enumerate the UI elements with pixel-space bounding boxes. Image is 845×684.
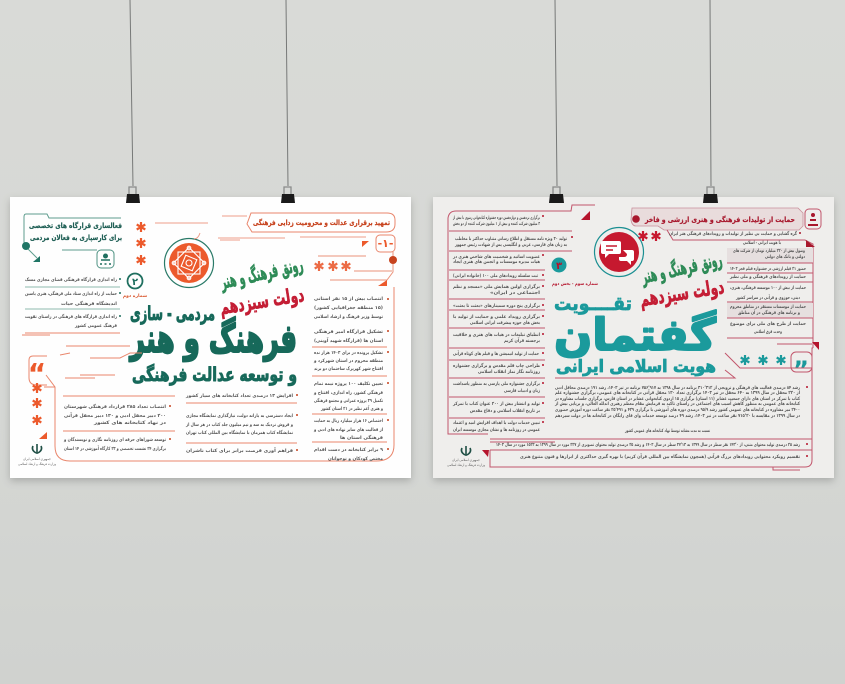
- main title: [554, 293, 716, 377]
- panel: right text column: (۱۵ منطقه جغرافیایی کشور): [314, 305, 383, 311]
- panel: main paragraph: رشد ۲۵ درصدی تولید محتوای متنی، از ۱۴۳٬۰ نفر سطر در سال ۱۳۹۹ به ۳۷٬۱۳ سطر در سال ۱۴۰۳ و رشد ۲۵ درصدی تولید محتوای تصویری از ۲۲۷ مورد در سال ۱۳۹۹ به ۱۵۲۳ مورد در سال ۱۴۰۳: [496, 442, 800, 448]
- panel: left text column: برگزاری اولین همایش ملی «مسجد و نظم: [453, 283, 540, 290]
- panel: main paragraph: [490, 344, 813, 470]
- panel: support heading: حمایت از تولیدات فرهنگی و هنری ارزشی و فاخر: [644, 215, 795, 224]
- poster: culture and art, people-centred: [10, 197, 411, 478]
- panel: main paragraph: ۲۴۰۰ میز مشاوره در کتابخانه های عمومی کشور رشد ۹۵/۹ درصدی دوره های آموزشی با برگزاری ۴۲۹ و ۲۵٬۴۹۱ نفر ساعت دوره آموزش حضوری: [555, 406, 800, 413]
- panel: left text column: ۳ میلیون شرکت کننده و بیش از ۱ میلیون شرکت کننده از دو بخش: [453, 221, 540, 227]
- panel: right text column: ۹ برابر کتابخانه در دست اقدام: [314, 447, 383, 453]
- panel: right text column: [667, 230, 815, 348]
- emblem: ministry logo: وزارت فرهنگ و ارشاد اسلامی: [18, 462, 56, 466]
- panel: right text column: تشکیل قرارگاه امیر فرهنگی: [314, 328, 383, 335]
- asterisks row top: [639, 231, 660, 241]
- panel: left text column: زبان و ادبیات فارسی: [504, 388, 540, 394]
- panel: main paragraph: در سال ۱۳۹۹ در مقایسه با ۷۱۵٬۲۰ نفر ساعت در تیر ۱۴۰۳، رشد ۴۹ درصد توسعه خدمات وای فای رایگان در کتابخانه ها در دولت سیزدهم: [555, 412, 800, 419]
- panel: right text column: تشکیل پرونده در برای ۱۴۰۳ هزار نده: [314, 350, 383, 356]
- main title: فرهنگ و هنر: [129, 316, 297, 362]
- main title: گفتمان: [554, 309, 716, 361]
- panel: main paragraph: کتاب با تمرکز در استان های دارای جمعیت عشایر (۱۱ استان) برگزاری ۱۵ اردوی کتابخوانی عشایر در استان فارس، برگزاری جلسات مشاوره در: [554, 395, 800, 402]
- panel: left text column: انطباق تبلیغات در هیات های هنری و خلاقیت: [453, 332, 540, 338]
- panel: left lower text column: انتصاب تعداد ۲۸۵ قرارداد فرهنگی شهرستان: [64, 403, 166, 410]
- asterisks row teal: [741, 355, 785, 365]
- panel: right text column: حمایت از رویدادهای فرهنگی و ملی نظیر: [729, 273, 806, 280]
- panel: left text column: هیات مدیره موسسات و انجمن های هنری ایجاد: [453, 259, 540, 265]
- panel: left text column: برگزاری رویداد علمی و حمایت از تولید با: [453, 313, 540, 320]
- panel: right text column: و برنامه های فرهنگی در آن مناطق: [738, 309, 800, 316]
- triangle marker lower: [482, 450, 489, 457]
- panel: workshop bullet list: راه اندازی قرارگاه فرهنگی فضای مجازی مسک: [25, 276, 117, 283]
- panel: workshop bullet list: حمایت از راه اندازی ستاد ملی فرهنگی، هنری یاسین: [25, 290, 117, 297]
- issue number badge: شماره دوم: [123, 294, 148, 299]
- emblem: ministry logo: جمهوری اسلامی ایران: [452, 458, 480, 462]
- panel: right text column: وحدت فرق اسلامی: [754, 329, 782, 335]
- panel: support heading: [631, 208, 803, 230]
- panel: left lower text column: ۲۰۰ دبیر محفل ادبی و ۱۳۰ دبیر محفل قرآنی: [64, 412, 166, 419]
- asterisks row: [315, 261, 350, 271]
- emblem: ministry logo: وزارت فرهنگ و ارشاد اسلامی: [447, 463, 485, 467]
- issue number badge: [552, 258, 598, 287]
- panel: main paragraph: از ۲۲۰ محفل در سال ۱۳۹۹ به ۶۴۰ محفل در تیر ۱۴۰۳ برگزاری تعداد ۱۳۰ محفل قرآنی در کتابخانه های عمومی، برگزاری جشنواره علم: [555, 389, 800, 396]
- panel: right text column: حمایت از طرح های ملی برای موضوع: [730, 321, 806, 327]
- quote mark box: ”: [793, 356, 809, 384]
- panel: right text column: فرهنگی استان ها: [340, 434, 383, 441]
- panel: left text column: ثبت سلسله رویدادهای ملی ۱۰۰ (خانواده ایرانی): [453, 273, 538, 279]
- issue number badge: ٢: [132, 277, 138, 288]
- panel: left lower text column: برگزاری ۲۴ نشست تخصصی و ۲۳ کارگاه آموزشی در ۱۴ استان: [64, 445, 166, 452]
- poster: culture and art, people-centred: رونق فرهنگ و هنر: [218, 252, 305, 294]
- icon: chat emblem: [594, 228, 644, 276]
- panel: right text column: تکمیل ۳۹ پروژه عمرانی و مجتمع فرهنگی: [314, 397, 383, 404]
- panel: main paragraph: نسبت به مدت مشابه توسط نهاد کتابخانه های عمومی کشور: [624, 428, 710, 434]
- panel: right text column: با هویت ایرانی - اسلامی: [743, 240, 781, 246]
- quote mark box: [791, 352, 812, 384]
- panel: left text column: عمومی در روزنامه ها و نشان مجازی موسسه ایران: [453, 427, 540, 433]
- emblem: ministry logo: جمهوری اسلامی ایران: [23, 457, 51, 461]
- emblem: ministry logo: [447, 446, 485, 467]
- red triangle near top: [581, 211, 590, 220]
- panel: middle text column: افزایش ۱۳ درصدی تعداد کتابخانه های سیار کشور: [185, 393, 293, 399]
- panel: left text column: برگزاری پنج دوره سمینارهای «بعثت تا بعثت»: [453, 302, 540, 309]
- panel: right text column: وصول بیش از ۲۲۰ میلیارد تومان از شرکت های: [733, 248, 805, 254]
- icon: people hierarchy: [805, 209, 821, 229]
- panel: left text column: اجتماعی در ایران»: [490, 290, 540, 296]
- panel: right text column: دینی، حوزوی و قرآنی در سراسر کشور: [735, 294, 800, 301]
- panel: justice heading: تمهید برقراری عدالت و محرومیت زدایی فرهنگی: [253, 218, 390, 227]
- panel: right text column: افتتاح شهر کهریزک ساختمان دو برند: [314, 365, 383, 372]
- quote mark box: “: [28, 357, 46, 390]
- main title: [129, 303, 297, 386]
- panel: right text column: توسط وزیر فرهنگ و ارشاد اسلامی: [314, 313, 383, 320]
- main title: و توسعه عدالت فرهنگی: [132, 363, 297, 386]
- icon: workshop: [97, 250, 114, 268]
- panel: left text column: تولید و انتشار بیش از ۲۰۰ عنوان کتاب با تمرکز: [452, 401, 540, 407]
- panel: left text column: بر تاریخ انقلاب اسلامی و دفاع مقدس: [470, 408, 540, 414]
- panel: right text column: حمایت از بیش از ۱۰۰ موسسه فرهنگی، هنری،: [730, 284, 806, 291]
- panel: right text column: اختصاص ۱۶ هزار میلیارد ریال به حمایت: [314, 418, 383, 424]
- panel: middle text column: [185, 393, 298, 454]
- main title: هویت اسلامی ایرانی: [556, 357, 716, 377]
- triangle marker lower: [39, 432, 47, 439]
- calligraphy logo: دولت سیزدهم: [638, 274, 726, 311]
- panel: right text column: حضور ۲۱ فیلم ارزشی در جشنواره فیلم فجر ۱۴۰۳: [730, 266, 806, 272]
- panel: left text column: عضویت اساتید و شخصیت های شاخص هنری در: [452, 254, 540, 260]
- panel: left text column: تبیین خدمات دولت با اهداف افزایش امید و اعتماد: [453, 420, 540, 426]
- triangle marker right: [812, 342, 819, 350]
- hanging wires and clips: [126, 0, 718, 203]
- issue number badge: [123, 274, 148, 299]
- panel: right text column: از فعالیت های سایر نهاده های ادبی و: [313, 427, 383, 433]
- panel: main paragraph: تقسیم رویکرد محتوایی رویدادهای بزرگ قرآنی (همچون نمایشگاه بین المللی قرآن کریم) با بهره گیری حداکثری از ابزارها و فنون متنوع هنری: [520, 453, 800, 460]
- panel: workshop bullet list: [25, 276, 121, 333]
- panel: specialised workshops heading: [22, 214, 122, 262]
- panel: right text column: منطقه محروم در استان شهرکرد و: [313, 358, 383, 364]
- panel: specialised workshops heading: فعالسازی قرارگاه های تخصصی: [29, 221, 122, 230]
- panel: right text column: و هنری آغم نظیر در ۲۱ استان کشور: [320, 405, 383, 412]
- panel: justice heading: [247, 213, 395, 232]
- panel: middle text column: ایجاد دسترسی به یارانه دولت، نیازگذاری نمایشگاه مجازی: [186, 412, 293, 419]
- panel: main paragraph: رشد ۸۴ درصدی فعالیت های فرهنگی و ترویجی از ۳۱۰٬۳۱۲ برنامه در سال ۱۳۹۸ به ۷۵۶٬۹۱۷ برنامه در تیر ۱۴۰۳، رشد ۱۹۱ درصدی محافل ادبی: [555, 384, 800, 391]
- panel: right text column: حمایت از موسسات مستقر در مناطق محروم: [730, 304, 806, 310]
- panel: left text column: بخش های حوزه پیشرفت ایرانی اسلامی: [470, 320, 540, 326]
- asterisks column top: [137, 222, 145, 265]
- panel: left lower text column: در نهاد کتابخانه های کشور: [93, 420, 167, 426]
- icon: number one box with arrow: -١-: [378, 237, 393, 250]
- calligraphy logo: [638, 247, 726, 311]
- panel: middle text column: نمایشگاه کتاب همزمان با نمایشگاه بین المللی کتاب تهران: [186, 429, 293, 436]
- panel: left text column: برجسته قرآن کریم: [504, 337, 540, 344]
- issue number badge: شماره سوم - بخش دوم: [552, 282, 598, 287]
- panel: workshop bullet list: فرهنگ عمومی کشور: [74, 322, 117, 329]
- panel: middle text column: فراهم آوری فرصت برابر برای کتاب ناشران: [186, 447, 293, 454]
- panel: right text column: فرهنگی کشور، راه اندازی، افتتاح و: [313, 389, 383, 396]
- panel: left text column: به زبان های فارسی، عربی و انگلیسی پس از شهادت رئیس جمهور: [454, 241, 567, 248]
- panel: left lower text column: توسعه شوراهای حرفه ای روزنامه نگاری و نویسندگان و: [63, 436, 166, 443]
- outer frame: [22, 287, 394, 461]
- panel: left text column: [448, 205, 595, 434]
- panel: left text column: حمایت از تولید انیمیشن ها و فیلم های کوتاه قرآنی: [453, 350, 539, 357]
- icon: number one box with arrow: [362, 235, 397, 264]
- panel: left text column: طراحی چاپ قلم مقدس و برگزاری جشنواره: [453, 362, 540, 369]
- panel: right text column: دولتی و بانک های دولتی: [765, 254, 805, 260]
- panel: workshop bullet list: اندیشگاه فرهنگی حیات: [61, 300, 117, 307]
- panel: right text column: [312, 296, 389, 462]
- panel: right text column: تعیین تکلیف ۱۰۰ پروژه نیمه تمام: [314, 381, 383, 387]
- small orange triangle: [378, 280, 387, 286]
- main title: مردمی - سازی: [130, 303, 215, 325]
- icon: orange mandala emblem: [164, 238, 214, 288]
- panel: right text column: انتصاب بیش از ۱۵ نفر استانی: [314, 296, 383, 302]
- panel: right text column: استان ها (قرارگاه شهید آوینی): [314, 337, 383, 344]
- panel: left text column: تولید ۳۰ ویژه نامه مستقل و اطلاع رسانی متناوب حداکثر با مخاطب: [455, 236, 567, 242]
- panel: left lower text column: [63, 396, 175, 452]
- panel: left text column: روزنامه نگار نماز انقلاب اسلامی: [478, 368, 540, 375]
- issue number badge: ٣: [556, 261, 562, 272]
- asterisks column bottom: [33, 383, 41, 425]
- panel: left text column: برگزاری نزدهمین و دوازدهمین دوره جشنواره کتابخوانی رضوی با بیش از: [452, 214, 540, 221]
- poster: strengthening islamic iranian discourse: [433, 197, 834, 478]
- connector lines upper: [155, 216, 393, 280]
- poster: strengthening islamic iranian discourse: رونق فرهنگ و هنر: [639, 247, 724, 288]
- calligraphy logo: دولت سیزدهم: [218, 282, 306, 319]
- panel: right text column: مختص کودکان و نوجوانان: [328, 456, 383, 462]
- panel: specialised workshops heading: برای کارسپاری به فعالان مردمی: [30, 233, 122, 242]
- calligraphy logo: [218, 252, 306, 319]
- panel: left text column: برگزاری جشنواره ملی پارسی به منظور پاسداشت: [453, 380, 540, 387]
- main title: تقــــویت: [554, 293, 632, 315]
- panel: middle text column: و فروش نزدیک به سه و نیم میلیون جلد کتاب در هر سال از: [185, 422, 293, 428]
- panel: workshop bullet list: راه اندازی قرارگاه های فرهنگی در راستای تقویت: [25, 313, 117, 320]
- emblem: ministry logo: [18, 444, 56, 466]
- panel: right text column: گره گشایی و حمایت بی نظیر از تولیدات و رویدادهای فرهنگی هنر ایران: [669, 230, 797, 237]
